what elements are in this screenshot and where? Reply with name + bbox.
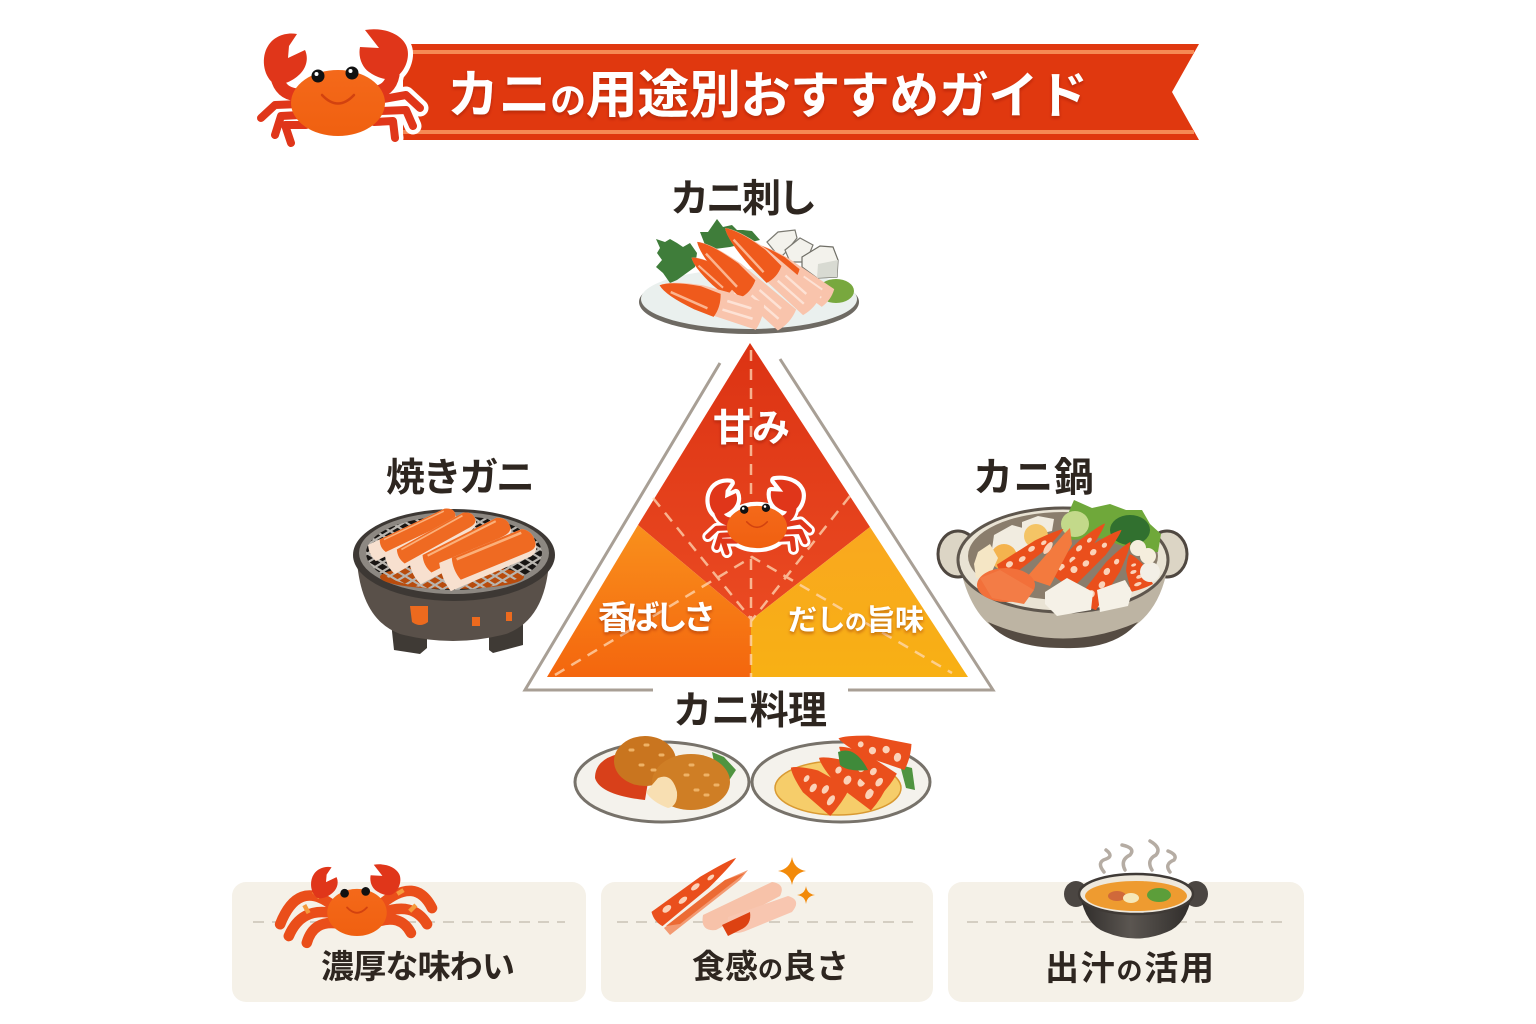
- illustration: crab hot pot: [938, 500, 1187, 648]
- illustration: crab omelette plate: [752, 725, 930, 822]
- segment: sweetness: [638, 343, 870, 620]
- icon: steam: [1100, 841, 1175, 872]
- heading: crab sashimi: カニ刺し: [670, 178, 817, 221]
- ribbon stripes: [403, 52, 1194, 132]
- label: umami: だしの旨味: [788, 604, 924, 637]
- icon: crab legs: [650, 851, 796, 936]
- label: sweetness: 甘み: [713, 408, 790, 450]
- icon: crab: [280, 864, 432, 943]
- heading: crab hot pot: カニ鍋: [973, 456, 1094, 500]
- icon: centre crab: [708, 480, 809, 553]
- icon: soup pot: [1064, 874, 1208, 938]
- illustration: crab sashimi plate: [639, 218, 859, 334]
- label: 濃厚な味わい: [321, 948, 515, 985]
- heading: crab dishes: カニ料理: [673, 690, 827, 733]
- icon: sparkles: [778, 857, 815, 904]
- outer frame: [525, 359, 993, 690]
- triangle diagram: [525, 343, 993, 690]
- segment: umami: [751, 527, 968, 677]
- label: aroma: 香ばしさ: [598, 599, 716, 636]
- dashed guides: [555, 350, 952, 677]
- illustration: grilled crab on charcoal grill: [353, 505, 555, 654]
- segment: aroma: [547, 525, 751, 677]
- icon: title crab: [261, 29, 420, 143]
- card: good texture: [601, 851, 933, 1002]
- heading: grilled crab: 焼きガニ: [386, 457, 535, 500]
- card: rich flavour: [232, 864, 586, 1002]
- card: use of broth: [948, 841, 1304, 1002]
- illustration: crab croquette plate: [575, 736, 749, 822]
- ribbon: [403, 44, 1199, 140]
- label: 食感の良さ: [692, 948, 849, 985]
- title banner: [403, 44, 1199, 140]
- label: 出汁の活用: [1045, 950, 1214, 988]
- title: カニの用途別おすすめガイド: [447, 67, 1088, 125]
